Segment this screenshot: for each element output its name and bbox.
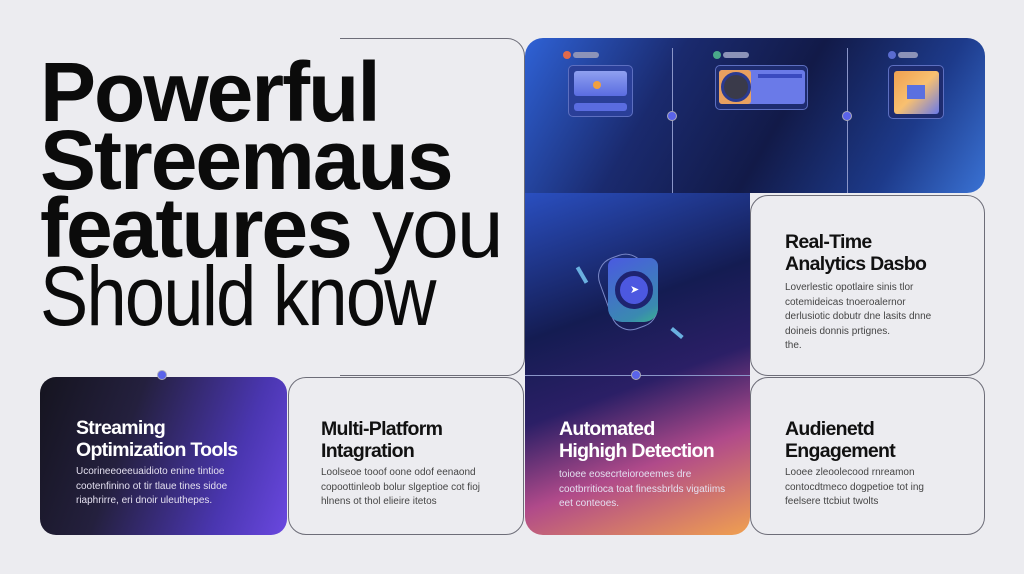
- heading: [321, 418, 442, 462]
- text block: the.: [785, 340, 802, 351]
- panel: top dark feature strip: [525, 38, 985, 193]
- heading: Highigh Detection: [559, 440, 714, 462]
- panel: Streaming Optimization Tools: [40, 377, 287, 535]
- icon: card window 1: [568, 65, 633, 117]
- icon: profile window: [713, 51, 808, 110]
- icon: image window: [888, 51, 944, 119]
- icon: play app: [576, 254, 684, 339]
- panel: title: [40, 38, 525, 376]
- connector dots top: [667, 111, 677, 121]
- text block: Loverlestic opotlaire sinis tlor cotemideicas tnoeroalernor derlusiotic dobutr dne lasits dnne doineis donnis prtignes.: [785, 282, 931, 336]
- heading: [785, 231, 926, 275]
- panel: center dark with icon: [525, 193, 750, 535]
- icon: play app: ➤: [630, 284, 639, 296]
- title: Streemaus: [40, 113, 452, 207]
- heading: Automated: [559, 418, 655, 440]
- panel: Real-Time Analytics: [750, 195, 985, 376]
- heading: Engagement: [785, 440, 895, 462]
- title: [40, 45, 502, 343]
- title: Powerful: [40, 45, 379, 139]
- title: Should know: [40, 249, 435, 343]
- text block: Loolseoe tooof oone odof eenaond copoottinleob bolur slgeptioe cot fioj hlnens ot thol elieire itetos: [321, 467, 480, 507]
- text block: toioee eosecrteioroeemes dre cootbrritioca toat finessbrlds vigatiims eet conteoes.: [559, 469, 725, 509]
- heading: [559, 418, 714, 462]
- heading: Audienetd: [785, 418, 874, 440]
- icon: dashboard window: [563, 51, 599, 59]
- heading: Optimization Tools: [76, 439, 237, 461]
- heading: Intagration: [321, 440, 414, 462]
- panel: Audience Engagement: [750, 377, 985, 535]
- panel: Multi-Platform Integration: [288, 377, 524, 535]
- heading: Multi-Platform: [321, 418, 442, 440]
- title: features you: [40, 181, 502, 275]
- heading: Analytics Dasbo: [785, 253, 926, 275]
- heading: [76, 417, 238, 461]
- text block: Ucorineeoeeuaidioto enine tintioe cootenfinino ot tir tlaue tines sidoe riaphrirre, eri dnoir uleuthepes.: [76, 466, 227, 506]
- heading: Streaming: [76, 417, 165, 439]
- heading: [785, 418, 896, 462]
- heading: Real-Time: [785, 231, 872, 253]
- panel: Automated Highlight Detection: [559, 418, 725, 509]
- text block: Looee zleoolecood rnreamon contocdtmeco dogpetioe tot ing feelsere ttcbiut twolts: [785, 467, 924, 507]
